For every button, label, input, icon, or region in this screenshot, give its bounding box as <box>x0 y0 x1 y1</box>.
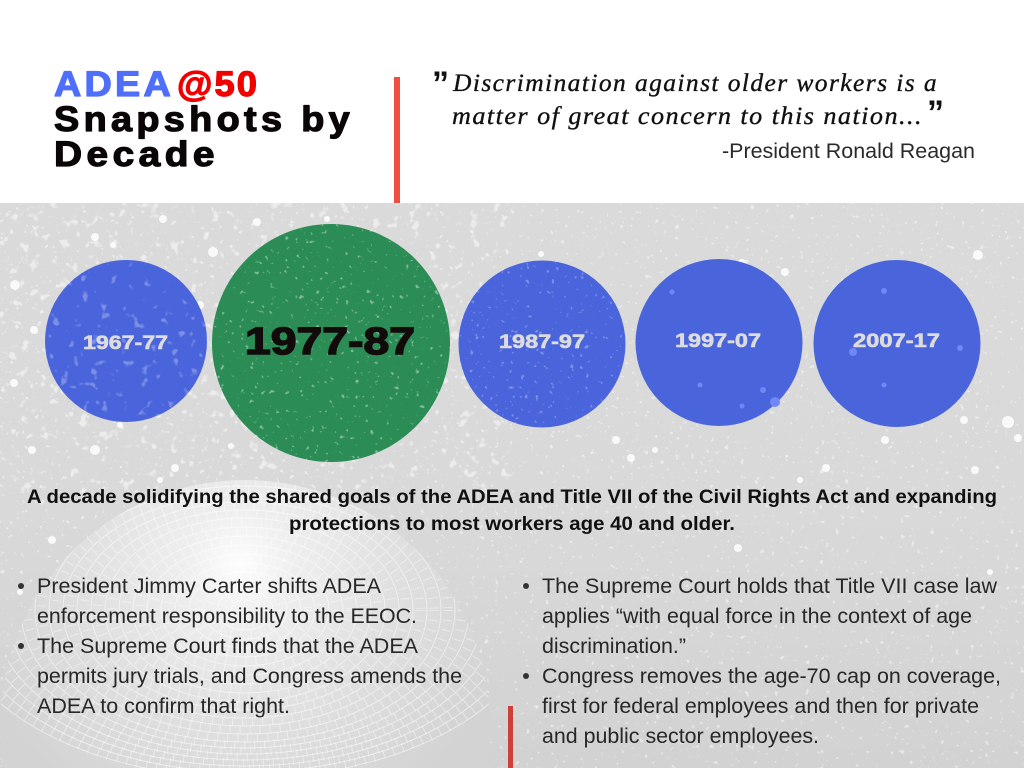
circle: 1987-97 <box>458 260 626 428</box>
bullets: right column: Congress removes the age-70 cap on coverage, <box>542 664 1001 688</box>
circle: 1997-07: 1997-07 <box>675 331 761 352</box>
glitter background panel <box>0 203 1024 768</box>
title line: ADEA@50 <box>54 65 259 104</box>
bullets: left column: permits jury trials, and Congress amends the <box>37 664 462 688</box>
quote <box>432 65 975 163</box>
quote text <box>452 70 938 130</box>
circle: 1987-97: 1987-97 <box>499 332 585 353</box>
attribution: -President Ronald Reagan <box>722 139 975 163</box>
bullets: right column <box>523 574 1001 748</box>
bullets: left column: President Jimmy Carter shifts ADEA <box>37 574 382 598</box>
bullets: left column: The Supreme Court finds that the ADEA <box>37 634 419 658</box>
decade summary <box>27 487 997 535</box>
opening quote mark: ” <box>432 65 449 103</box>
timeline circles <box>45 224 980 462</box>
decade summary: A decade solidifying the shared goals of the ADEA and Title VII of the Civil Rights Act and expanding <box>27 487 997 508</box>
circle: 1967-77 <box>45 260 207 422</box>
bullets: right column: The Supreme Court holds that Title VII case law <box>542 574 997 598</box>
circle: 1967-77: 1967-77 <box>83 333 168 354</box>
bullets: left column: ADEA to confirm that right. <box>37 694 290 718</box>
decade summary: protections to most workers age 40 and older. <box>289 514 735 535</box>
quote text: matter of great concern to this nation... <box>452 103 923 130</box>
title line: ADEA@50: ADEA <box>54 65 174 104</box>
bullets: right column: applies “with equal force in the context of age <box>542 604 972 628</box>
circle: 1997-07 <box>636 259 802 426</box>
bullets: left column <box>18 574 462 718</box>
red vertical divider <box>394 77 400 203</box>
circle: 1977-87 active: 1977-87 <box>245 321 415 363</box>
circle: 2007-17 <box>814 260 980 427</box>
title line: ADEA@50: @50 <box>177 65 259 104</box>
red bottom divider <box>508 706 513 768</box>
bullets: right column: and public sector employees. <box>542 724 819 748</box>
disco ball <box>0 480 490 768</box>
circle: 1977-87 active <box>212 224 450 462</box>
title <box>54 65 354 174</box>
title line: Decade: Decade <box>54 135 219 174</box>
white header band <box>0 0 1024 203</box>
title line: Snapshots by: Snapshots by <box>54 100 354 139</box>
bullets: right column: first for federal employees and then for private <box>542 694 979 718</box>
bullets: left column: enforcement responsibility to the EEOC. <box>37 604 417 628</box>
closing quote mark: ” <box>927 94 944 132</box>
circle: 2007-17: 2007-17 <box>853 331 940 352</box>
bullets: right column: discrimination.” <box>542 634 686 658</box>
quote text: Discrimination against older workers is a <box>452 70 938 97</box>
